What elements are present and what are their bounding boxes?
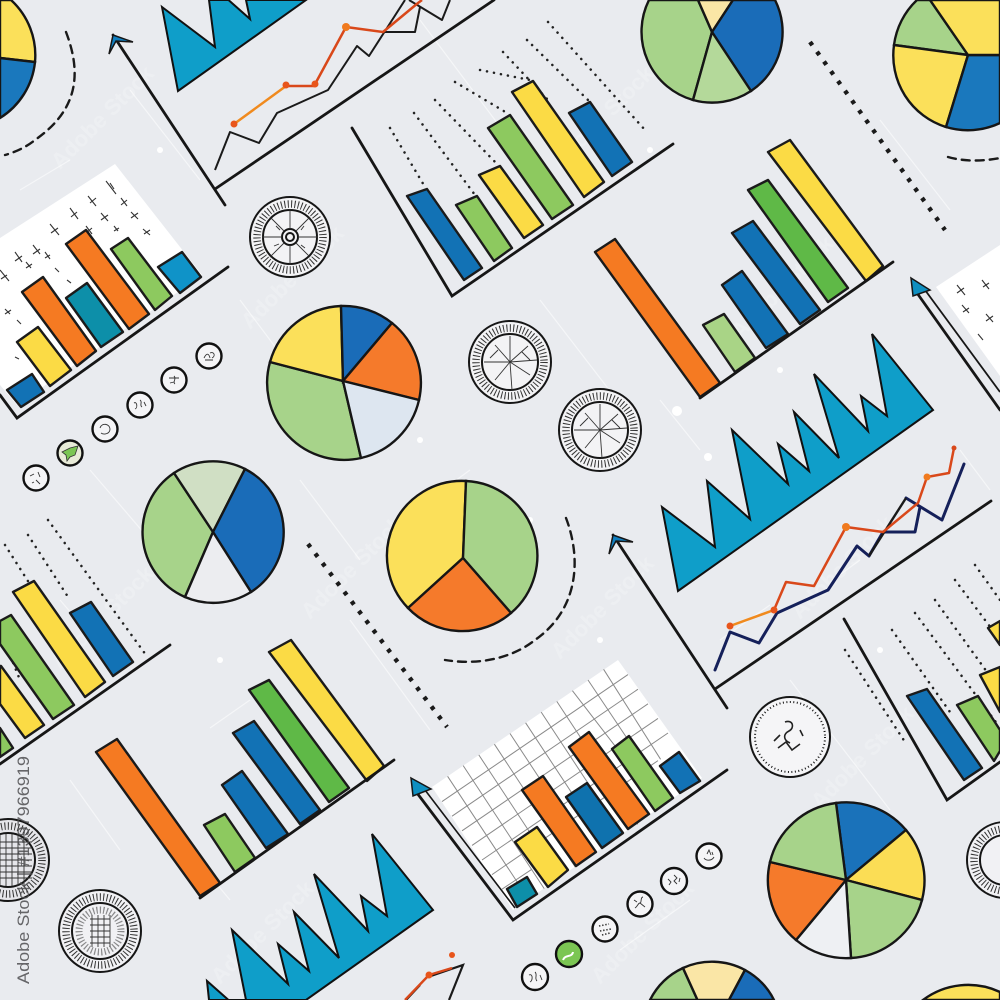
coin: right edge [967,822,1000,898]
grid bar chart: bottom centre [411,660,727,920]
background texture and scratches: Adobe Stock [786,510,899,624]
dashed arc: top right [948,157,1000,160]
axis crosses [0,181,150,359]
line chart: right centre [609,446,991,708]
line chart: bottom fragment [405,952,463,1000]
grid chart fragment: right edge [911,245,1000,410]
bar chart: top centre [352,22,673,296]
pie chart: centre left [143,461,284,603]
background texture and scratches: Adobe Stock [546,550,659,664]
background texture and scratches: Adobe Stock [586,875,699,989]
coin: lower right [750,697,830,777]
background texture and scratches: Adobe Stock [206,875,319,989]
dotted line: centre [308,544,447,727]
background texture and scratches: Adobe Stock [46,560,159,674]
coin: centre [469,321,551,403]
grid lines [442,669,668,899]
watermark: vertical stock credit: Adobe Stock | #1397966919 [14,756,33,984]
pie chart: centre top [267,306,421,460]
bar chart: right edge [844,565,1000,800]
small coin row: left [24,344,222,490]
background texture and scratches: Adobe Stock [726,230,839,344]
bar chart: bottom left [96,640,394,898]
coin: left edge [0,819,49,901]
dashed arc: top left [5,32,75,155]
small coin row: bottom [522,844,722,990]
pie chart: bottom right edge [923,985,1000,1000]
dotted line: top right [810,42,945,230]
background texture and scratches: Adobe Stock [296,510,409,624]
pie chart: top left edge [0,0,35,118]
background texture and scratches: Adobe Stock [806,700,919,814]
bar chart: left edge [0,520,170,764]
area chart: bottom [207,834,433,1000]
pie chart: top right [893,0,1000,130]
dashed arc: centre [445,518,575,662]
area chart: right centre [662,334,933,591]
coin: top centre-left [250,197,330,277]
background texture and scratches: Adobe Stock [46,60,159,174]
background texture and scratches: Adobe Stock [236,220,349,334]
coin: bottom left [59,890,141,972]
axes with arrow [417,770,727,920]
pie chart: top centre [642,0,783,103]
pie chart: bottom right [768,802,924,958]
line chart: top [109,0,494,205]
bar chart: right centre [595,140,893,398]
pie chart: centre [387,481,537,631]
grid bar chart: left panel [0,164,228,418]
background texture and scratches: Adobe Stock [546,60,659,174]
coin: centre right [559,389,641,471]
pie chart: bottom centre [650,962,774,1000]
area chart: top [162,0,306,91]
